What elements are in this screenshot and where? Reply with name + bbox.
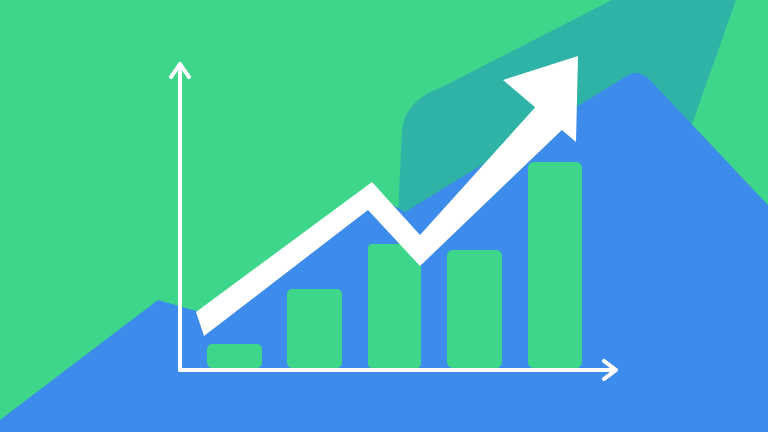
teal background shape — [398, 0, 736, 215]
bars — [207, 162, 582, 368]
trend arrow — [196, 56, 578, 336]
axes — [171, 64, 616, 379]
